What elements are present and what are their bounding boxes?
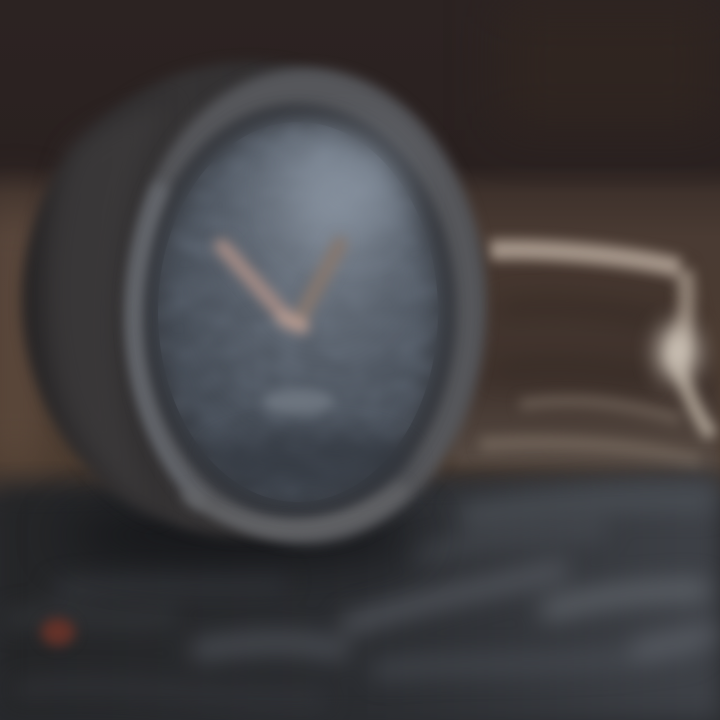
table contact shadow bbox=[60, 507, 420, 563]
minute hand bbox=[298, 244, 340, 322]
table red accent bbox=[41, 618, 75, 646]
hour hand bbox=[222, 246, 290, 322]
clock back body bbox=[22, 62, 478, 538]
clock rim dark inner bbox=[140, 104, 456, 520]
clock lower text smudge bbox=[262, 389, 334, 415]
table base bbox=[0, 472, 720, 720]
stack light edges bbox=[480, 250, 712, 462]
clock hands bbox=[222, 244, 340, 326]
book stack on the right bbox=[450, 250, 720, 470]
stack highlight bbox=[658, 324, 698, 380]
clock body shading bbox=[45, 105, 170, 515]
clock inner ring bbox=[134, 190, 200, 500]
stack body bbox=[450, 250, 720, 470]
clock face texture bbox=[158, 236, 437, 496]
clock face glow bbox=[290, 140, 400, 240]
table soft streaks bbox=[10, 499, 708, 700]
slate table surface bbox=[0, 472, 720, 720]
clock face bbox=[158, 122, 438, 502]
stack dark page lines bbox=[495, 307, 660, 378]
clock outer rim bbox=[126, 68, 486, 544]
clock face lower shade bbox=[210, 430, 410, 490]
clock lower rim bbox=[190, 490, 400, 528]
background: soft wall tones bbox=[0, 0, 720, 470]
clock bbox=[22, 62, 486, 544]
hands pivot bbox=[284, 318, 302, 326]
